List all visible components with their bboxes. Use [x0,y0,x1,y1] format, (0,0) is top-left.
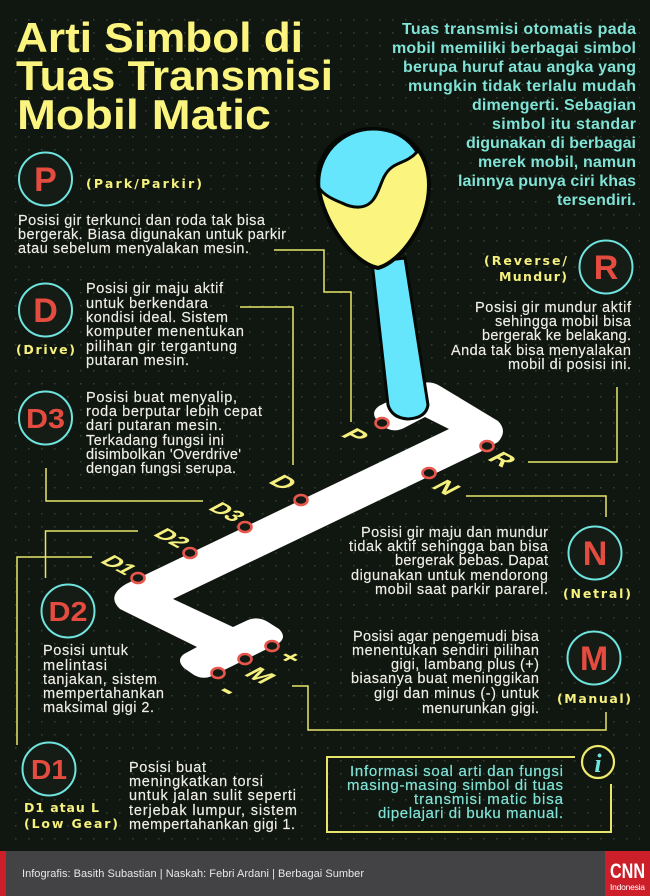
gate letters: R [481,448,524,471]
R text: bergerak ke belakang. [482,328,631,344]
panel: P [18,152,286,257]
D text: untuk berkendara [86,296,209,312]
gate letters: N [425,476,468,499]
icon: D3 circle: D3 [26,403,65,434]
panel: D1 [22,742,297,833]
gear stick [318,129,429,419]
D1 text: mempertahankan gigi 1. [129,817,295,833]
R label: Mundur) [499,269,567,284]
D3 text: disimbolkan 'Overdrive' [86,447,241,463]
gate letters: D1 [95,552,144,578]
footer credits: Infografis: Basith Subastian | Naskah: Febri Ardani | Berbagai Sumber [22,868,364,880]
R label: (Reverse/ [484,253,567,268]
N text: mobil saat parkir pararel. [375,582,548,598]
icon: info: i [594,749,602,778]
icon: D2 circle: D2 [48,596,88,627]
M text [351,629,540,717]
M text: gigi dan minus (-) untuk [374,686,540,702]
icon: M circle [568,632,620,684]
intro text: mobil memiliki berbagai simbol [392,40,636,57]
logo: CNN Indonesia: Indonesia [610,882,645,892]
M label: (Manual) [557,691,631,706]
intro text: merek mobil, namun [478,154,636,171]
intro text: tersendiri. [557,192,636,209]
gate letters: - [207,679,250,702]
info text: Informasi soal arti dan fungsi [350,763,563,780]
gate letters: + [270,647,311,668]
R text: Posisi gir mundur aktif [475,300,632,316]
D label: (Drive) [16,342,75,357]
intro text [392,21,636,209]
D1 text: untuk jalan sulit seperti [129,788,296,804]
D2 text: melintasi [43,658,107,674]
D text: pilihan gir tergantung [86,339,237,355]
gate letters: M [238,663,283,687]
D1 text: terjebak lumpur, sistem [129,803,297,819]
R text: sehingga mobil bisa [495,314,632,330]
D1 text: meningkatkan torsi [129,774,263,790]
panel: M [351,629,631,717]
M text: biasanya buat meninggikan [351,671,539,687]
panel: N [349,525,631,601]
info text: dipelajari di buku manual. [378,805,563,822]
intro text: Tuas transmisi otomatis pada [402,21,636,38]
D text: Posisi gir maju aktif [86,281,224,297]
R text: mobil di posisi ini. [508,357,631,373]
intro text: digunakan di berbagai [466,135,636,152]
gate letters [95,424,524,702]
logo: CNN Indonesia [605,851,650,896]
D2 text: Posisi untuk [43,643,129,659]
P text: Posisi gir terkunci dan roda tak bisa [18,213,266,229]
D text [86,281,244,369]
title: Mobil Matic [17,91,271,138]
gate letters: D2 [148,525,197,551]
D3 text: dari putaran mesin. [86,418,222,434]
gear position dots [132,418,494,678]
gate letters: D3 [203,499,252,525]
P text: bergerak. Biasa digunakan untuk parkir [18,227,286,243]
footer [0,851,650,896]
D text: komputer menentukan [86,324,244,340]
N text: bergerak bebas. Dapat [395,553,548,569]
D1 label: (Low Gear) [24,816,118,831]
D2 text [43,643,164,716]
knob cyan cap [319,129,417,207]
D2 text: maksimal gigi 2. [43,700,154,716]
gate letters: P [335,424,376,446]
D text: kondisi ideal. Sistem [86,310,228,326]
intro text: mungkin tidak terlalu mudah [408,78,636,95]
stick shaft [372,258,428,419]
panel: D2 [42,584,164,716]
N text: digunakan untuk mendorong [351,568,548,584]
callout border [327,757,611,832]
panel: R [451,240,632,373]
panel: D3 [19,390,262,477]
info text [347,763,564,822]
icon: D1 circle [22,742,76,796]
R text: Anda tak bisa menyalakan [451,343,631,359]
icon: D3 circle [19,392,72,444]
D3 text: Terkadang fungsi ini [86,433,224,449]
icon: N circle: N [583,535,607,573]
M text: Posisi agar pengemudi bisa [353,629,540,645]
D1 label [24,800,118,831]
title [16,14,333,138]
icon: info [582,746,614,778]
P text [18,213,286,257]
R text [451,300,632,373]
icon: D circle [19,284,72,336]
D3 text: dengan fungsi serupa. [86,461,236,477]
stick knob [318,129,429,268]
icon: D circle: D [33,292,58,330]
title: Tuas Transmisi [16,52,333,99]
panel: D [16,281,244,369]
N label: (Netral) [563,586,631,601]
icon: R circle: R [594,249,618,287]
icon: D1 circle: D1 [31,754,67,785]
intro text: simbol itu standar [492,116,636,133]
N text: tidak aktif sehingga ban bisa [349,539,549,555]
gate letters: D [262,471,305,494]
P text: atau sebelum menyalakan mesin. [18,241,249,257]
icon: M circle: M [580,640,608,678]
icon: P circle [19,152,72,206]
D3 text: roda berputar lebih cepat [86,404,262,420]
intro text: dimengerti. Sebagian [472,97,636,114]
icon: P circle: P [34,161,57,199]
D3 text: Posisi buat menyalip, [86,390,237,406]
D1 label: D1 atau L [24,800,99,815]
connector lines [17,250,617,745]
info text: transmisi matic bisa [414,791,564,808]
P label: (Park/Parkir) [86,176,202,191]
title: Arti Simbol di [16,14,303,61]
N text: Posisi gir maju dan mundur [361,525,548,541]
callout: info box [327,746,614,832]
info text: masing-masing simbol di tuas [347,777,563,794]
D2 text: mempertahankan [43,686,164,702]
D1 text [129,760,297,833]
R label [484,253,567,284]
D3 text [86,390,262,477]
D1 text: Posisi buat [129,760,206,776]
M text: gigi, lambang plus (+) [391,657,539,673]
M text: menentukan sendiri pilihan [352,643,539,659]
icon: N circle [568,526,622,580]
D2 text: tanjakan, sistem [43,672,157,688]
intro text: lainnya punya ciri khas [458,173,636,190]
D text: putaran mesin. [86,353,189,369]
intro text: berupa huruf atau angka yang [403,59,636,76]
N text [349,525,549,598]
icon: R circle [580,240,632,294]
M text: menurunkan gigi. [422,701,539,717]
shift gate track [114,382,503,678]
